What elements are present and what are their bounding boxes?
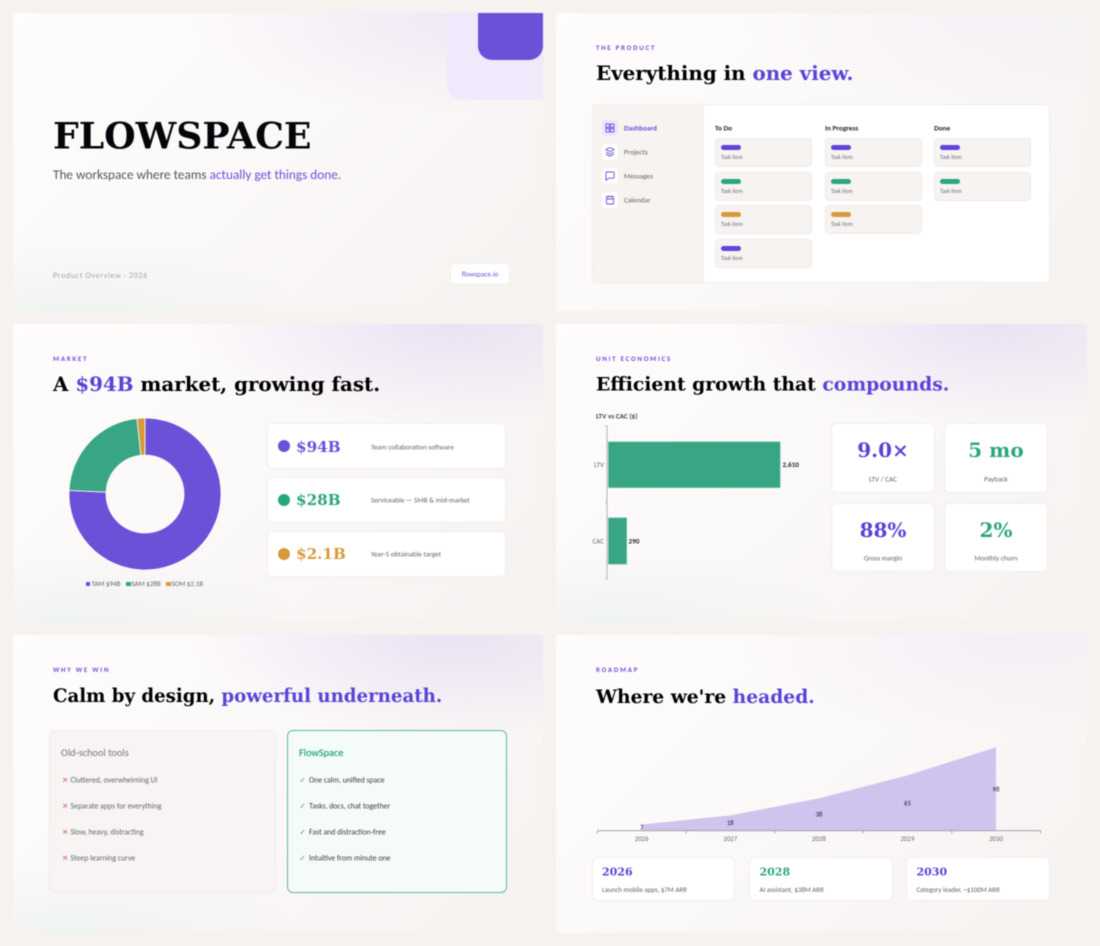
- eyebrow label: THE PRODUCT: [596, 42, 656, 51]
- milestone card: 2030: 2030: [916, 865, 947, 878]
- nav item: calendar: Calendar: [624, 196, 650, 205]
- slide: market: [13, 324, 543, 622]
- url badge: flowspace.io: [462, 270, 498, 279]
- area chart: 2029: [901, 835, 915, 843]
- column: to do: Task item: [721, 254, 743, 262]
- milestone card: 2026: Launch mobile apps, $7M ARR: [602, 885, 687, 894]
- panel: flowspace: FlowSpace: [299, 746, 343, 759]
- milestone card: 2030: [906, 857, 1050, 901]
- column: to do: Task item: [721, 154, 743, 160]
- market card: SOM: [267, 531, 506, 577]
- donut legend: TAM $94B: [92, 579, 120, 588]
- panel: old-school tools: ✕: [62, 854, 68, 864]
- column: in progress: Task item: [831, 220, 853, 228]
- area chart: 2027: [723, 835, 738, 843]
- stat card: monthly churn: Monthly churn: [974, 554, 1018, 563]
- panel: flowspace: ✓: [300, 828, 306, 838]
- stat card: LTV / CAC: 9.0×: [857, 438, 909, 462]
- nav item: projects: Projects: [624, 148, 648, 157]
- decorative light purple block: [447, 13, 543, 100]
- heading: Everything in one view.: [596, 61, 853, 85]
- panel: old-school tools: [49, 730, 276, 893]
- chart title: LTV vs CAC ($): [596, 411, 637, 420]
- slide: title: [13, 13, 543, 311]
- eyebrow label: MARKET: [53, 353, 88, 362]
- stat card: payback: Payback: [984, 475, 1008, 484]
- area chart: 2030: [989, 835, 1003, 843]
- column: in progress: In Progress: [825, 123, 858, 132]
- stat card: gross margin: Gross margin: [864, 554, 902, 563]
- eyebrow label: UNIT ECONOMICS: [596, 353, 672, 362]
- panel: flowspace: ✓: [300, 802, 306, 812]
- stat card: LTV / CAC: LTV / CAC: [869, 475, 897, 484]
- column: to do: Task item: [721, 220, 743, 228]
- nav item: projects: [602, 144, 648, 160]
- panel: flowspace: One calm, unified space: [309, 776, 384, 785]
- donut legend: SAM $28B: [132, 579, 161, 588]
- heading: Calm by design, powerful underneath.: [53, 686, 442, 707]
- donut legend: [85, 579, 204, 588]
- panel: old-school tools: Old-school tools: [61, 746, 129, 759]
- nav item: messages: [602, 168, 654, 184]
- slide: why we win: [13, 635, 543, 933]
- donut legend: SOM $2.1B: [172, 579, 203, 588]
- nav item: dashboard: Dashboard: [624, 124, 657, 133]
- area chart: 98: [993, 785, 1000, 793]
- column: to do: [714, 123, 812, 268]
- heading: Where we're headed.: [596, 685, 815, 707]
- column: in progress: Task item: [831, 154, 853, 160]
- eyebrow label: WHY WE WIN: [53, 664, 110, 673]
- column: done: Task item: [940, 154, 962, 160]
- column: to do: To Do: [715, 123, 732, 132]
- heading: Efficient growth that compounds.: [596, 374, 949, 396]
- title: FLOWSPACE: [53, 114, 311, 157]
- panel: old-school tools: Cluttered, overwhelming UI: [70, 776, 158, 785]
- app mockup: [592, 104, 1050, 283]
- column: done: Done: [934, 123, 950, 132]
- stat card: monthly churn: [944, 503, 1048, 572]
- milestone card: 2028: [749, 857, 892, 901]
- subtitle: The workspace where teams actually get things done.: [53, 166, 341, 183]
- panel: old-school tools: Separate apps for everything: [70, 802, 161, 811]
- panel: old-school tools: ✕: [62, 802, 68, 812]
- area chart: 2026: [635, 835, 649, 843]
- bar chart: 2,610: [782, 460, 799, 469]
- stat card: payback: [944, 423, 1048, 493]
- panel: old-school tools: ✕: [62, 828, 68, 838]
- area chart: [596, 747, 1042, 843]
- milestone card: 2028: 2028: [760, 865, 790, 878]
- nav item: dashboard: [602, 120, 658, 136]
- market card: SAM: $28B: [296, 491, 341, 509]
- milestone card: 2026: [592, 857, 735, 901]
- heading: A $94B market, growing fast.: [53, 372, 380, 396]
- column: done: [934, 123, 1031, 201]
- slide: roadmap: [556, 635, 1087, 933]
- panel: flowspace: Fast and distraction-free: [309, 828, 386, 837]
- area chart: 65: [904, 799, 911, 807]
- nav item: messages: Messages: [624, 172, 653, 181]
- area chart: 7: [640, 824, 644, 832]
- market card: SOM: $2.1B: [296, 545, 346, 563]
- column: to do: Task item: [721, 188, 743, 194]
- footer text: Product Overview · 2026: [53, 271, 148, 281]
- eyebrow label: ROADMAP: [596, 664, 639, 673]
- url badge: [450, 263, 510, 285]
- column: in progress: Task item: [831, 188, 853, 194]
- bar chart: [592, 425, 800, 580]
- stat card: gross margin: 88%: [860, 518, 906, 542]
- panel: flowspace: Intuitive from minute one: [309, 854, 390, 863]
- milestone card: 2026: 2026: [602, 865, 633, 878]
- panel: flowspace: ✓: [300, 854, 306, 864]
- area chart: 2028: [812, 835, 826, 843]
- bar chart: LTV: [594, 460, 604, 469]
- sidebar: [592, 104, 704, 284]
- decorative purple block: [478, 13, 543, 60]
- donut chart: [68, 418, 222, 570]
- slide: unit economics: [556, 324, 1087, 622]
- milestone card: 2030: Category leader, ~$100M ARR: [916, 885, 1000, 894]
- market card: TAM: [267, 423, 506, 469]
- area chart: 18: [727, 819, 734, 827]
- panel: old-school tools: ✕: [62, 776, 68, 786]
- stat card: LTV / CAC: [831, 423, 935, 493]
- market card: SOM: Year-5 obtainable target: [371, 550, 441, 559]
- panel: flowspace: Tasks, docs, chat together: [309, 802, 390, 811]
- panel: flowspace: [287, 730, 507, 893]
- market card: SAM: [267, 477, 506, 523]
- column: in progress: [824, 123, 922, 234]
- bar chart: 290: [628, 536, 640, 546]
- milestone card: 2028: AI assistant, $38M ARR: [760, 885, 824, 894]
- stat card: monthly churn: 2%: [980, 518, 1012, 542]
- market card: SAM: Serviceable — SMB & mid-market: [371, 496, 470, 505]
- slide: the product: [556, 13, 1087, 311]
- column: done: Task item: [940, 188, 962, 194]
- area chart: 38: [815, 810, 823, 818]
- panel: old-school tools: Slow, heavy, distracting: [70, 828, 144, 837]
- market card: TAM: Team collaboration software: [371, 443, 454, 452]
- panel: flowspace: ✓: [300, 776, 306, 786]
- market card: TAM: $94B: [296, 438, 341, 456]
- bar chart: CAC: [593, 536, 604, 546]
- panel: old-school tools: Steep learning curve: [70, 854, 135, 863]
- nav item: calendar: [602, 192, 651, 208]
- stat card: gross margin: [831, 503, 935, 572]
- stat card: payback: 5 mo: [968, 438, 1024, 462]
